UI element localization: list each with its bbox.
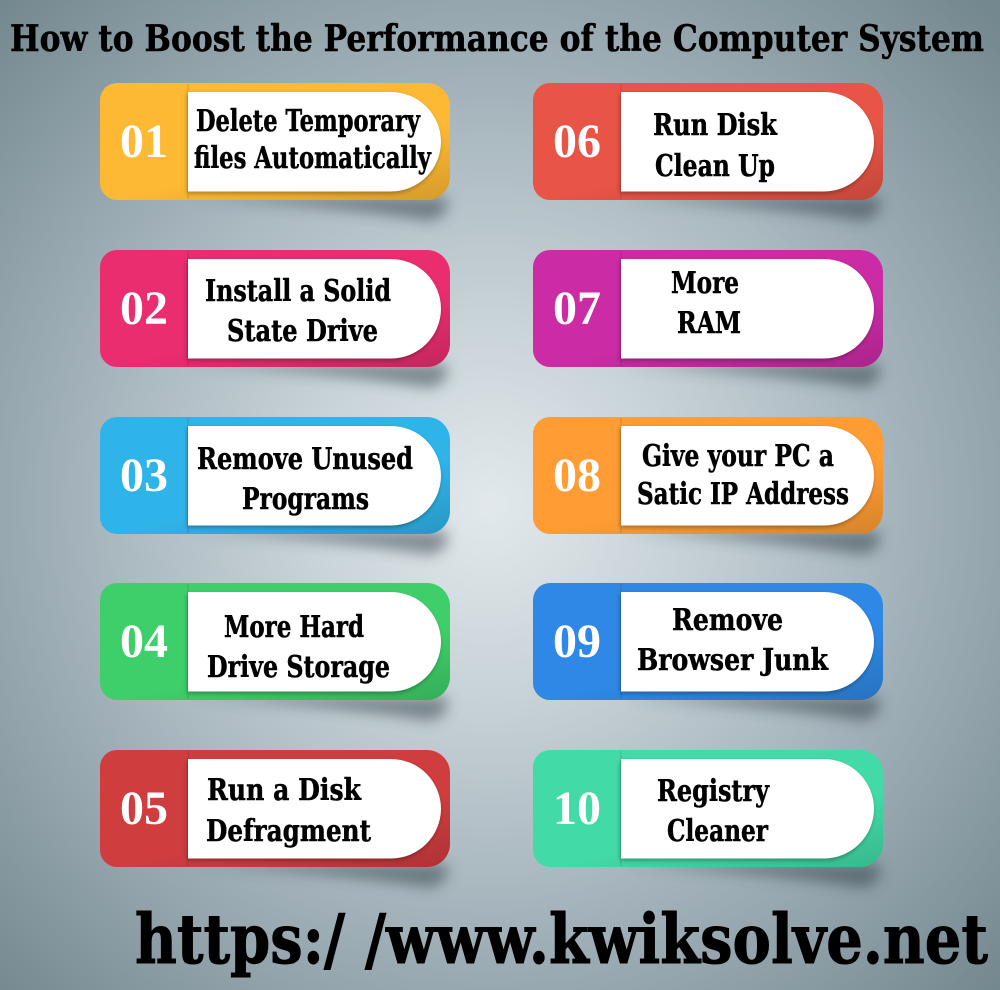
card 07: more RAM: 07: [553, 282, 601, 335]
card 03: remove unused programs: Programs: [242, 482, 369, 517]
card 05: run a disk defragment: [100, 750, 450, 888]
card 06: run disk clean up: [533, 83, 883, 221]
card 03: remove unused programs: [100, 417, 450, 555]
card 06: run disk clean up: 06: [553, 115, 601, 168]
card 09: remove browser junk: 09: [553, 615, 601, 668]
card 06: run disk clean up: Clean Up: [655, 149, 775, 184]
card 02: install SSD: 02: [120, 282, 168, 335]
card 04: more hard drive storage: [100, 583, 450, 721]
card 10: registry cleaner: 10: [553, 782, 601, 835]
card 04: more hard drive storage: Drive Storage: [207, 650, 390, 685]
card 08: static IP address: Satic IP Address: [637, 477, 849, 512]
card 09: remove browser junk: Browser Junk: [637, 643, 829, 678]
card 05: run a disk defragment: 05: [120, 782, 168, 835]
card 03: remove unused programs: 03: [120, 449, 168, 502]
card 08: static IP address: [533, 417, 883, 555]
card 06: run disk clean up: Run Disk: [653, 108, 778, 143]
card 08: static IP address: 08: [553, 449, 601, 502]
card 05: run a disk defragment: Run a Disk: [207, 773, 362, 808]
card 02: install SSD: Install a Solid: [205, 274, 391, 309]
card 10: registry cleaner: Registry: [657, 774, 770, 809]
card 07: more RAM: RAM: [677, 306, 741, 341]
card 04: more hard drive storage: 04: [120, 615, 168, 668]
card 07: more RAM: More: [671, 266, 739, 301]
card 02: install SSD: [100, 250, 450, 388]
card 10: registry cleaner: Cleaner: [667, 814, 769, 849]
card 09: remove browser junk: Remove: [672, 603, 783, 638]
card 01: delete temporary files: [100, 83, 450, 221]
card 10: registry cleaner: [533, 750, 883, 888]
card 05: run a disk defragment: Defragment: [206, 814, 371, 849]
card 01: delete temporary files: Delete Temporary: [196, 104, 421, 139]
card 01: delete temporary files: 01: [120, 115, 168, 168]
card 03: remove unused programs: Remove Unused: [197, 442, 413, 477]
card 07: more RAM: [533, 250, 883, 388]
card 04: more hard drive storage: More Hard: [224, 610, 364, 645]
card 09: remove browser junk: [533, 583, 883, 721]
card 02: install SSD: State Drive: [227, 314, 378, 349]
card 08: static IP address: Give your PC a: [642, 439, 834, 474]
card 01: delete temporary files: files Automatically: [194, 141, 432, 176]
